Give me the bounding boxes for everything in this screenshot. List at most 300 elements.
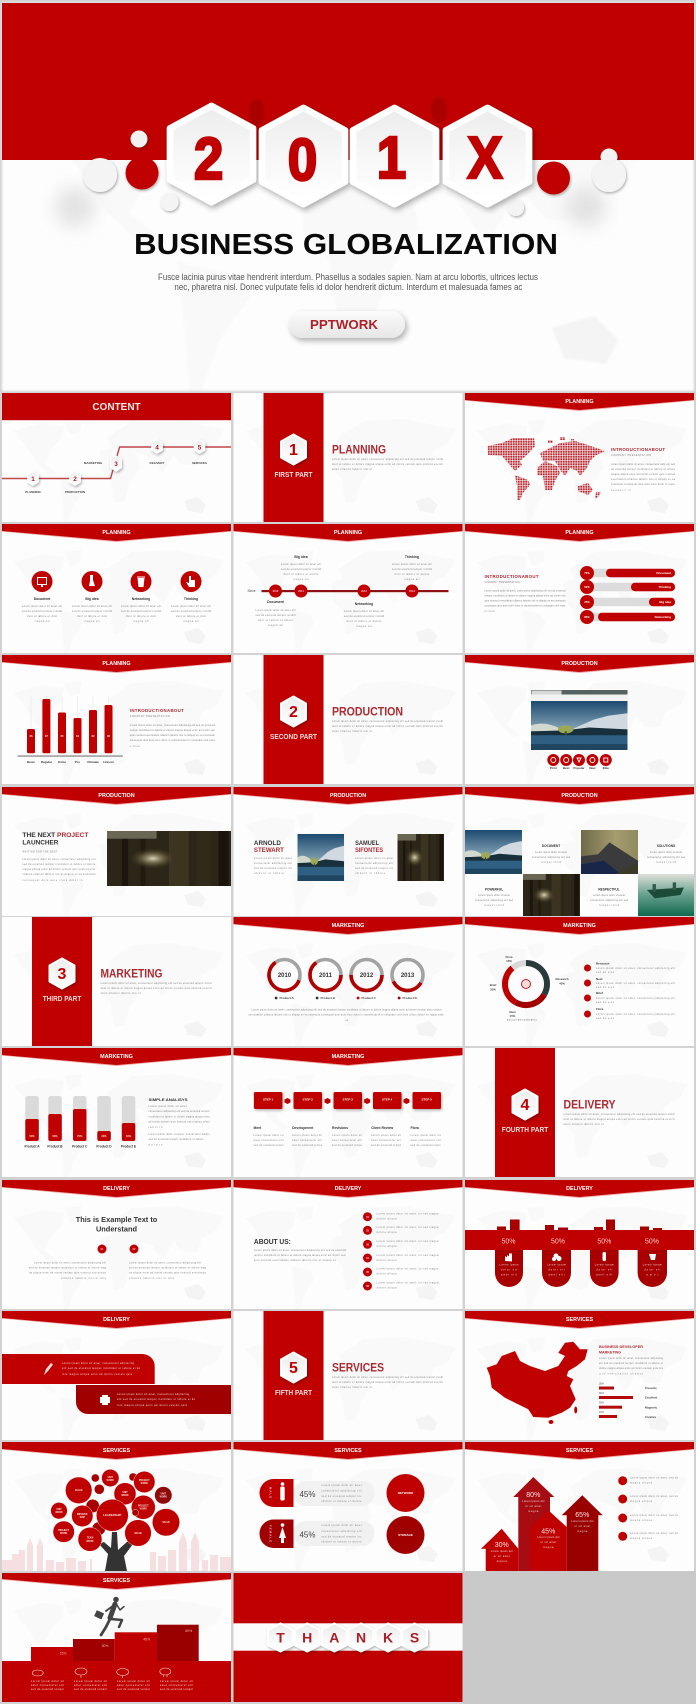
- stair text: Lorem ipsum dolor sit: [117, 1680, 150, 1683]
- chevron header: [465, 1311, 694, 1329]
- step text: amet consectetur elit: [332, 1139, 362, 1142]
- step text: Lorem ipsum dolor sit: [371, 1134, 401, 1137]
- stair text: [31, 1680, 193, 1691]
- cylinder values: 20%: [101, 1134, 107, 1138]
- section text: ation ullamco laboris nisi ut: [100, 992, 141, 995]
- percent values: 25%: [584, 600, 590, 604]
- chevron header: [234, 1442, 462, 1460]
- analysis text: Lorem ipsum dolor sit amet: [148, 1105, 187, 1108]
- part number: 2: [289, 704, 298, 721]
- percent values: 85%: [584, 615, 590, 619]
- panel: delivery band tabs: [465, 1180, 694, 1309]
- chevron header: [465, 787, 694, 805]
- section text: [564, 1113, 675, 1126]
- item titles: Thinking: [184, 597, 198, 601]
- section text: [332, 1376, 443, 1389]
- section text: Lorem ipsum dolor sit amet, consectetur adipiscing elit sed do eiusmod tempor incidi: [332, 458, 443, 461]
- item text: sed do eiusmod tempor incidid: [72, 610, 113, 613]
- bar percents: 35%: [599, 1382, 605, 1386]
- chevron header: MARKETING: [332, 1054, 364, 1060]
- timeline text: dunt ut labore et dolore: [284, 573, 319, 576]
- step titles: Revisions: [332, 1126, 348, 1130]
- chevron header: PLANNING: [334, 530, 362, 536]
- red stripe: [495, 1048, 555, 1177]
- bar names: Presente: [645, 1386, 657, 1390]
- circle labels: [398, 1491, 414, 1537]
- chevron header: DELIVERY: [566, 1186, 593, 1192]
- red stripe: [32, 917, 92, 1046]
- lower text: [117, 1393, 196, 1407]
- list text: Lorem ipsum dolor sit amet, sit sed magna: [376, 1282, 439, 1284]
- thanks letters: A: [329, 1630, 339, 1646]
- china map: [487, 1342, 588, 1424]
- year digits: 2: [194, 125, 223, 192]
- part number: 4: [521, 1097, 530, 1114]
- bar chart: 36: [29, 734, 33, 738]
- step labels: STEP 2: [303, 1098, 313, 1102]
- thanks letters: S: [410, 1630, 419, 1646]
- hexagon badge: [281, 1352, 306, 1382]
- section text: ation ullamco laboris nisi ut: [332, 468, 372, 471]
- analysis text: incididunt ut labore et dolore magna aliqua enim: [148, 1116, 210, 1118]
- section title: DELIVERY: [564, 1100, 616, 1112]
- chevron header: [2, 1048, 231, 1066]
- dark crescents: [249, 97, 447, 125]
- item titles: [34, 597, 198, 601]
- chevron header: SERVICES: [103, 1578, 130, 1584]
- arrow values: 80%: [526, 1492, 540, 1499]
- chevron header: SERVICES: [566, 1448, 593, 1454]
- pill text: ididunt ut labore et dolore: [322, 1500, 362, 1503]
- ring center icon: [522, 980, 530, 988]
- red stripe: [264, 1311, 324, 1440]
- chevron header: [2, 1573, 231, 1590]
- bar names: Excellent: [645, 1396, 657, 1400]
- donut legend: Product A: [280, 996, 295, 1000]
- donut paragraph: [248, 1008, 444, 1022]
- thanks letters: H: [302, 1630, 312, 1646]
- numbered circles: [363, 1212, 372, 1290]
- timeline text: magna ali: [356, 625, 372, 628]
- step text: Lorem ipsum dolor sit: [254, 1134, 284, 1137]
- item text: dunt ut labore et dolo: [77, 615, 108, 618]
- tab text: Lorem ipsum: [643, 1264, 662, 1266]
- hexagon numbers: 2: [73, 476, 77, 483]
- arrow text: magna: [528, 1510, 539, 1513]
- list text: dolore aliqua: [376, 1231, 397, 1234]
- item text: Lorem ipsum dolor sit amet elit: [121, 605, 161, 608]
- bar chart: Honest: [103, 760, 114, 764]
- section title: PRODUCTION: [332, 707, 403, 719]
- section text: Lorem ipsum dolor sit amet, consectetur adipiscing elit sed do eiusmod tempor incidi: [332, 720, 443, 723]
- intro text: Lorem ipsum dolor sit amet, consectetur adip elit sed: [611, 463, 676, 466]
- feature labels: [550, 766, 609, 770]
- arrow 30 percent: [481, 1529, 518, 1571]
- tab text: [500, 1264, 662, 1276]
- arrow text: magna: [497, 1560, 507, 1563]
- band percentages: 50%: [597, 1238, 611, 1246]
- intro sub heading: COMPANY PRESENTATION: [484, 581, 520, 584]
- grey pills: [294, 1481, 374, 1546]
- donut years: 2013: [401, 973, 415, 979]
- bar percents: 55%: [599, 1402, 605, 1404]
- ring labels: Brief: [490, 983, 496, 987]
- timeline text: sed do eiusmod tempor incidid: [392, 568, 433, 571]
- chevron header: PLANNING: [102, 661, 131, 667]
- PPTWORK pill: PPTWORK: [310, 317, 379, 332]
- feature circles: [547, 754, 612, 766]
- right text: sed do eiusmod tempor incididunt ut labore et dolore mag: [129, 1266, 207, 1270]
- grid text: tempor incid: [599, 904, 620, 907]
- timeline text: Lorem ipsum dolor sit amet elit: [256, 609, 296, 612]
- empty grey slot: [463, 1571, 696, 1704]
- bubble labels: WORK: [60, 1533, 68, 1535]
- item text: magna ali: [134, 620, 149, 623]
- panel: marketing ring chart: [465, 917, 694, 1046]
- hexagon numbers: 3: [114, 461, 118, 468]
- profile one text: [254, 857, 293, 875]
- analysis heading: SIMPLE ANALISYS: [148, 1098, 188, 1102]
- step text: Lorem ipsum dolor sit: [292, 1134, 322, 1137]
- timeline headings: Big idea: [294, 555, 308, 559]
- percentages: 45%: [299, 1530, 316, 1540]
- arrow text: or sit amet: [494, 1555, 510, 1558]
- bubble labels: WORK: [140, 1508, 147, 1510]
- red ground: [2, 1661, 231, 1702]
- list text: Lorem ipsum dolor sit amet, consectetur adipiscing elit: [596, 982, 675, 985]
- intro text: do eiusmod tempor incididunt ut labore et dolore: [611, 468, 676, 471]
- panel: planning progress bars: [465, 524, 694, 653]
- launcher heading: THE NEXT PROJECT: [22, 832, 88, 839]
- left text: ullamco laboris nisi ut aliq: [61, 1277, 107, 1280]
- right text: ullamco laboris nisi ut aliq: [129, 1277, 175, 1280]
- tab text: Lorem ipsum: [547, 1264, 566, 1266]
- step text: Lorem ipsum dolor sit: [332, 1134, 362, 1137]
- list titles: Next: [596, 977, 603, 981]
- right text: Lorem ipsum dolor sit amet, consectetur adipiscing elit: [129, 1262, 201, 1264]
- item text: [22, 605, 212, 623]
- circle numbers: 05: [366, 1270, 369, 1274]
- year digits: 0: [288, 126, 317, 193]
- hexagon badge: [50, 958, 74, 988]
- panel: planning icons: [2, 524, 231, 653]
- vertical labels: MALE: [268, 1487, 272, 1499]
- intro text: quis nostrud exercitation ullamco laboris nisi ut aliquip ex ea commodo: [130, 734, 215, 737]
- panel: delivery example text: [2, 1180, 231, 1309]
- vertical labels: FEMALE: [268, 1525, 272, 1543]
- step values: 30%: [102, 1644, 108, 1648]
- item text: Lorem ipsum dolor sit amet elit: [72, 605, 112, 608]
- chevron header: [234, 787, 462, 805]
- circle numbers: 06: [366, 1284, 369, 1288]
- timeline nodes: [269, 584, 418, 598]
- profile one name: ARNOLD: [254, 841, 282, 847]
- step text: amet consectetur elit: [410, 1139, 441, 1142]
- bar chart: Ultimate: [87, 760, 99, 764]
- grid text: consectetur adipiscing elit sed: [590, 899, 629, 902]
- timeline text: sed do eiusmod tempor incidid: [281, 568, 322, 571]
- hexagon numbers: 4: [155, 444, 159, 452]
- dot numbers: [101, 1247, 136, 1251]
- cylinder labels: Product A: [24, 1144, 40, 1148]
- step values: 60%: [185, 1629, 192, 1633]
- step boxes: [254, 1092, 441, 1109]
- profile two text: consectetur adipiscing elit: [355, 862, 393, 865]
- map text: elit sed do eiusmod tempor incididunt ut labore et: [599, 1362, 663, 1365]
- thanks letters: [276, 1630, 419, 1646]
- part number: 1: [289, 442, 298, 459]
- percent values: 50%: [584, 585, 590, 589]
- chevron header: [465, 917, 694, 935]
- stair text: amet consectetur elit: [117, 1684, 150, 1687]
- panel: third part: [2, 917, 231, 1046]
- section text: ation ullamco laboris nisi ut: [564, 1123, 604, 1126]
- panel: services stairs: [2, 1573, 231, 1702]
- percent values: 75%: [584, 571, 590, 575]
- cloud icons: [32, 1668, 171, 1678]
- tree trunk: [99, 1532, 133, 1571]
- timeline headings: [267, 555, 419, 606]
- hexagon badge: [512, 1090, 538, 1120]
- section text: [100, 982, 212, 995]
- lower text: Lorem ipsum dolor sit amet, consectetur adipiscing: [117, 1393, 190, 1396]
- chevron header: PRODUCTION: [330, 793, 366, 799]
- hexagon badge: [281, 696, 306, 726]
- icon circles: [32, 571, 202, 592]
- arrow text: or sit amet: [574, 1525, 591, 1528]
- chevron header: MARKETING: [332, 923, 364, 929]
- ring labels: 30%: [490, 988, 496, 992]
- top blocks: [497, 1220, 662, 1231]
- cover description: [158, 272, 539, 292]
- ring labels: 15%: [506, 959, 512, 963]
- grid titles: DOCUMENT: [542, 844, 560, 848]
- node years: 2010: [273, 589, 279, 593]
- feature glyphs: [551, 758, 608, 762]
- bubble labels: WORK: [160, 1496, 167, 1498]
- intro text: Lorem ipsum dolor sit amet, consectetur adipiscing elit sed do eiusmod: [484, 590, 566, 592]
- bubble labels: LEADERSHIP: [103, 1513, 121, 1517]
- bar labels: [655, 571, 671, 619]
- step labels: PRODUCTION: [65, 490, 85, 494]
- pill text: consectetur adipiscing elit: [322, 1490, 362, 1492]
- step titles: [254, 1126, 419, 1130]
- lower bar: [76, 1385, 231, 1414]
- chevron header: DELIVERY: [103, 1186, 130, 1192]
- photos: [465, 830, 694, 916]
- chevron header: SERVICES: [103, 1448, 130, 1454]
- arrow text: or sit amet: [525, 1505, 542, 1508]
- panel: marketing cylinders: [2, 1048, 231, 1177]
- intro text: magna aliqua enim ad minim veniam quis nostrud: [611, 473, 676, 476]
- bubble labels: UNIT: [161, 1494, 167, 1496]
- section text: Lorem ipsum dolor sit amet, consectetur adipiscing elit sed do eiusmod tempor incidi: [332, 1376, 443, 1379]
- intro text: consequat duis aute irure dolor in reprehenderit in voluptate velit esse: [484, 604, 566, 608]
- profile two text: [355, 857, 394, 875]
- grid text: Lorem ipsum dolor sit amet: [593, 894, 625, 897]
- circle numbers: 03: [366, 1242, 369, 1246]
- bar percents: 80%: [599, 1392, 605, 1395]
- cover description: nec, pharetra nisl. Donec vulputate felis id dolor hendrerit dictum. Interdum et malesuada fames ac: [174, 282, 523, 292]
- part label: SECOND PART: [270, 734, 318, 741]
- pill text: sed do eiusmod tempor inc: [322, 1495, 362, 1498]
- cylinder fill: [25, 1109, 135, 1141]
- tab text: dolor sit: [644, 1268, 661, 1272]
- bubble labels: PROJECT: [138, 1506, 149, 1508]
- chevron header: DELIVERY: [103, 1317, 130, 1323]
- intro sub heading: COMPANY PRESENTATION: [130, 715, 170, 718]
- panel: production photo grid: [465, 787, 694, 916]
- hexagon badge: [281, 434, 306, 464]
- big circles: [386, 1474, 424, 1554]
- chevron header: [2, 1180, 231, 1198]
- panel: planning world map: [465, 393, 694, 522]
- upper bar: [2, 1354, 155, 1384]
- cylinder values: [29, 1134, 132, 1138]
- chevron header: [234, 1180, 462, 1198]
- left text: [29, 1262, 107, 1280]
- grid text: consectetur adipiscing elit sed: [532, 856, 571, 859]
- band percentages: [501, 1238, 659, 1246]
- list text: Lorem ipsum dolor sit amet, sed do: [630, 1476, 679, 1480]
- grid text: tempor incid: [541, 861, 562, 864]
- list text: dolore aliqua: [376, 1259, 397, 1262]
- analysis text: [148, 1105, 210, 1146]
- timeline headings: Document: [267, 600, 285, 604]
- panel: services china map: [465, 1311, 694, 1440]
- percent circles: [580, 566, 594, 624]
- chevron header: PLANNING: [102, 530, 131, 536]
- list text: magna aliqua: [630, 1500, 653, 1503]
- donut legend: Product C: [362, 996, 377, 1000]
- step titles: Flora: [410, 1126, 419, 1130]
- section text: ation ullamco laboris nisi ut: [332, 730, 372, 733]
- grid text: consectetur adipiscing elit sed: [475, 899, 514, 902]
- panel: planning timeline: [234, 524, 462, 653]
- bubble labels: TEAM: [87, 1536, 93, 1540]
- bubble labels: WORK: [55, 1512, 63, 1514]
- browser window: [531, 690, 628, 750]
- timeline text: sed do eiusmod tempor incidid: [256, 614, 296, 617]
- analysis text: Lorem ipsum dolor sit amet, consectetur adipis: [148, 1133, 210, 1136]
- chevron header: [2, 524, 231, 542]
- profile two text: sed do eiusmod tempor inc: [355, 867, 394, 870]
- ring labels: Next: [509, 1010, 516, 1014]
- vertical labels: [268, 1487, 272, 1543]
- panel: fourth part: [465, 1048, 694, 1177]
- panel: first part: [234, 393, 462, 522]
- list titles: Brief: [596, 991, 603, 995]
- section text: [332, 720, 443, 733]
- bar labels: Document: [656, 571, 671, 575]
- timeline text: Lorem ipsum dolor sit amet elit: [281, 563, 321, 566]
- arrow values: 65%: [575, 1512, 589, 1519]
- intro text: [130, 724, 215, 748]
- decorative circles: [83, 130, 626, 216]
- cylinder labels: [24, 1144, 136, 1148]
- example heading: Understand: [96, 1224, 138, 1234]
- timeline text: dunt ut labore et dolore: [258, 619, 294, 622]
- printer icon: [100, 1395, 110, 1405]
- arrow 80 percent: [513, 1477, 554, 1571]
- 201X hexagons: [170, 106, 529, 204]
- item text: Lorem ipsum dolor sit amet elit: [171, 605, 211, 608]
- tab icons: [505, 1252, 656, 1262]
- intro text: Lorem ipsum dolor sit amet, consectetur adipiscing elit sed do eiusmod: [130, 724, 215, 727]
- red stripe: [264, 655, 324, 784]
- profile one name: [254, 841, 284, 854]
- item text: magna ali: [34, 620, 50, 623]
- intro text: tempor incididunt ut labore et dolore magna aliqua enim ad minim ven: [130, 729, 215, 732]
- donut arcs: [265, 954, 429, 996]
- bar names: Creative: [645, 1415, 656, 1419]
- list text: Lorem ipsum dolor sit amet, sit sed magna: [376, 1254, 439, 1257]
- pill text: ididunt ut labore et dolore: [322, 1540, 362, 1544]
- item text: dunt ut labore et dolo: [27, 615, 58, 618]
- step labels: STEP 1: [263, 1098, 274, 1102]
- cylinder tracks: [25, 1096, 135, 1141]
- donut years: 2012: [360, 973, 374, 979]
- intro heading: INTRODUCTIONABOUT: [130, 708, 184, 713]
- example heading: This is Example Text to: [76, 1215, 158, 1224]
- circle labels: STORAGE: [398, 1533, 413, 1537]
- tab text: amet elit: [548, 1274, 565, 1276]
- item text: sed do eiusmod tempor incidid: [22, 610, 63, 613]
- pill text: Lorem ipsum dolor sit amet: [322, 1524, 362, 1527]
- step labels: DELIVERY: [150, 461, 164, 465]
- chevron header: MARKETING: [100, 1054, 133, 1060]
- chevron header: [465, 393, 694, 411]
- percentages: [299, 1490, 316, 1540]
- stair text: Lorem ipsum dolor sit: [160, 1680, 193, 1683]
- thanks letters: K: [383, 1630, 393, 1646]
- list text: [376, 1212, 439, 1290]
- launcher text: magna aliqua enim ad minim veniam quis nostrud exer: [22, 868, 96, 871]
- chevron header: DELIVERY: [335, 1186, 362, 1192]
- ring labels: 15%: [510, 1014, 516, 1018]
- bubble labels: SHIP: [80, 1517, 85, 1519]
- launcher text: consequat duis aute irure dolor in: [22, 879, 83, 882]
- item text: Lorem ipsum dolor sit amet elit: [22, 605, 62, 608]
- step labels: STEP 5: [422, 1098, 432, 1102]
- bubble labels: PROJECT: [139, 1480, 150, 1482]
- stair text: amet consectetur elit: [160, 1684, 193, 1687]
- step titles: Client Review: [371, 1126, 394, 1130]
- ring legend: ■ Research ■ Next ■ Brief ■ Flora: [507, 1018, 538, 1022]
- about text: [254, 1249, 347, 1262]
- chevron header: SERVICES: [334, 1448, 362, 1454]
- cylinder labels: Product D: [96, 1144, 112, 1148]
- donut years: 2011: [319, 973, 333, 979]
- step connectors: [284, 1098, 410, 1104]
- lower text: elit sed do eiusmod tempor incididunt ut labore et do: [117, 1398, 196, 1401]
- intro text: henderit in: [611, 489, 632, 492]
- bubble labels: WORK: [107, 1480, 114, 1482]
- ring labels: Research: [555, 977, 569, 981]
- panel: services arrows: [465, 1442, 694, 1571]
- bar chart: Pro: [75, 760, 80, 764]
- map heading: [599, 1345, 643, 1354]
- intro text: exercitation ullamco laboris nisi ut aliquip ex ea: [611, 478, 676, 481]
- chevron header: [2, 1311, 231, 1329]
- red bars: [598, 569, 675, 621]
- chevron header: [465, 655, 694, 673]
- cylinder labels: Product E: [121, 1144, 136, 1148]
- profile one name: STEWART: [254, 848, 284, 854]
- bubble labels: [55, 1477, 170, 1543]
- item text: dunt ut labore et dolo: [176, 615, 207, 618]
- year digits: [194, 124, 503, 193]
